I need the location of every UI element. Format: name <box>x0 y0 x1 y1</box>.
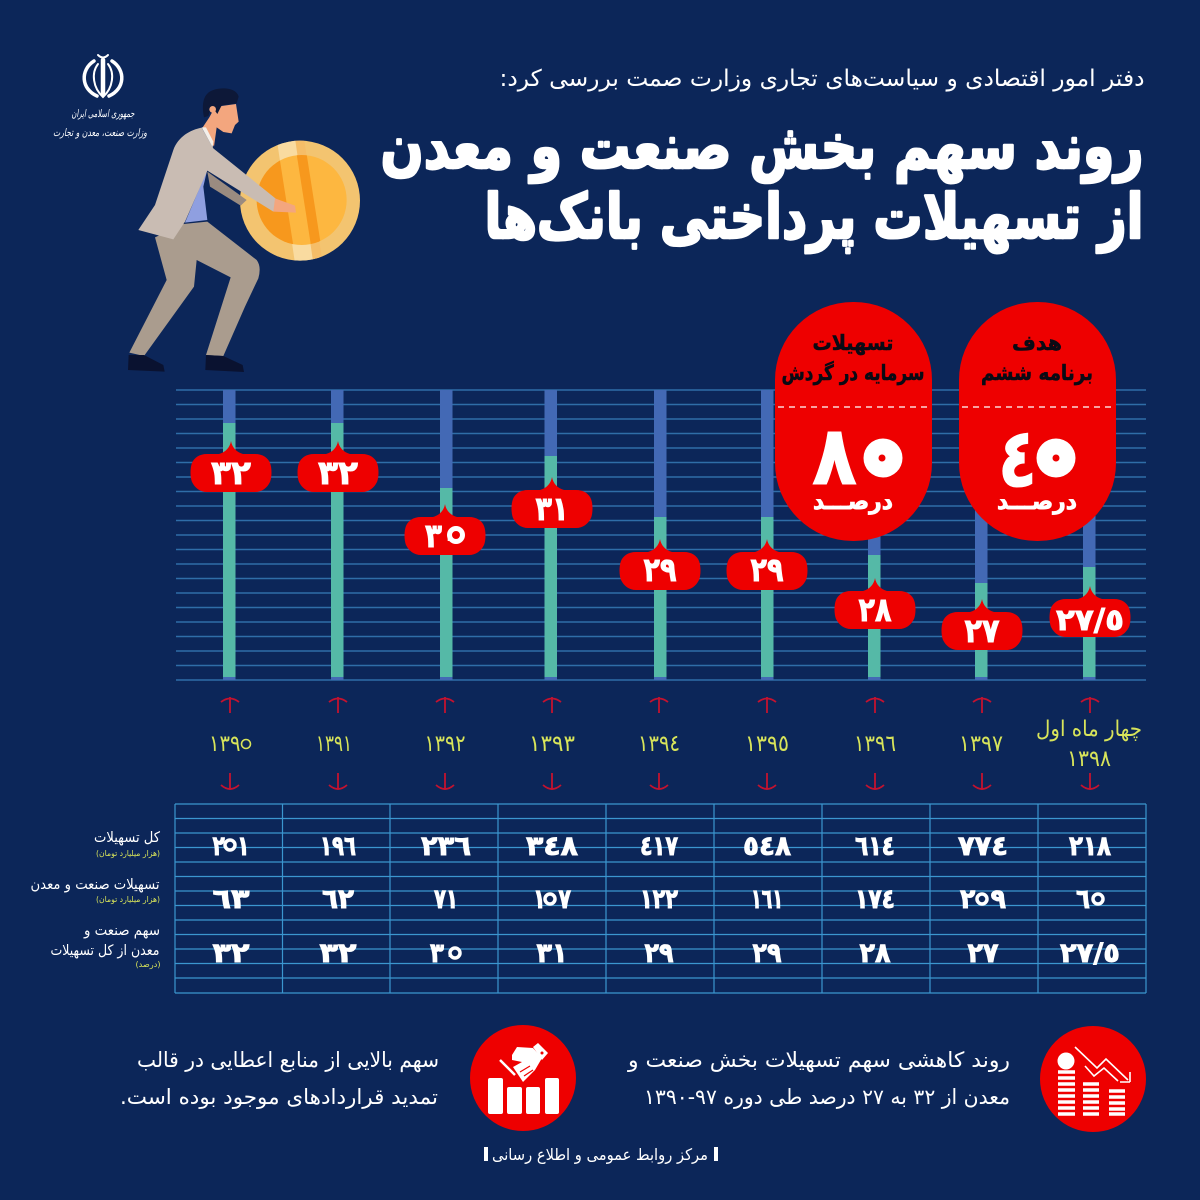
row: industry and mining facilities: ۱۲۲ <box>640 884 678 915</box>
row: total facilities: ۷۷٤ <box>958 831 1008 862</box>
table row labels: (هزار میلیارد تومان) <box>96 849 160 858</box>
icon: handshake over bars <box>470 1025 576 1131</box>
hair <box>203 88 239 117</box>
row: share of industry and mining: ۲۷ <box>968 938 999 969</box>
row: share of industry and mining: ۲۸ <box>860 938 891 969</box>
value labels: ۲۸ <box>858 590 892 629</box>
ear <box>209 106 216 113</box>
year labels: چهار ماه اول <box>1036 717 1142 742</box>
callout: working capital facilities 80 percent: درصـــد <box>813 489 893 515</box>
collar <box>202 127 213 147</box>
text: declining share note: روند کاهشی سهم تسهیلات بخش صنعت و <box>627 1048 1010 1073</box>
row: industry and mining facilities: ٦۰ <box>1076 884 1104 915</box>
value labels: ۲۹ <box>644 550 676 589</box>
year labels: ۱۳۹٦ <box>854 731 896 757</box>
year labels: ۱۳۹۰ <box>209 731 251 757</box>
callout: working capital facilities 80 percent: ۸۰ <box>812 409 902 504</box>
callout: sixth plan target 40 percent: درصـــد <box>997 489 1077 515</box>
illustration: businessman pushing a gold coin <box>128 88 360 372</box>
year labels: ۱۳۹٤ <box>638 731 680 757</box>
row: share of industry and mining <box>212 938 1120 969</box>
callout: sixth plan target 40 percent: هدف <box>1012 331 1062 355</box>
row: total facilities: ۲۰۱ <box>212 831 250 862</box>
table row labels: (درصد) <box>136 960 160 969</box>
chart: share of industry and mining by year <box>176 390 1146 680</box>
year labels: ۱۳۹۷ <box>959 731 1003 757</box>
row: industry and mining facilities: ۱۰۷ <box>533 884 571 915</box>
data table <box>175 804 1146 993</box>
neck and head <box>203 104 239 147</box>
year labels: ۱۳۹۸ <box>1067 746 1111 772</box>
row: industry and mining facilities: ۲۰۹ <box>960 884 1006 915</box>
hand <box>273 198 296 213</box>
trousers <box>129 222 260 356</box>
row: industry and mining facilities: ۱۷٤ <box>855 884 895 915</box>
row: share of industry and mining: ۲۹ <box>752 938 782 969</box>
value labels: ۳۱ <box>536 489 568 528</box>
value labels: ۳۲ <box>211 453 251 492</box>
row: total facilities: ۱۹٦ <box>320 831 356 862</box>
value labels: ۲۷/٥ <box>1056 603 1124 638</box>
footer: public relations credit: مرکز روابط عمومی و اطلاع رسانی <box>492 1145 708 1165</box>
row: share of industry and mining: ۲۹ <box>644 938 674 969</box>
table row labels: معدن از کل تسهیلات <box>50 943 160 959</box>
bars <box>223 390 1096 680</box>
text: declining share note <box>627 1048 1010 1109</box>
text: extension of contracts note <box>120 1048 439 1109</box>
row: total facilities: ۲۳٦ <box>421 831 471 862</box>
year labels: ۱۳۹۳ <box>529 731 575 757</box>
subtitle: دفتر امور اقتصادی و سیاست‌های تجاری وزارت صمت بررسی کرد: <box>500 66 1144 92</box>
row: industry and mining facilities: ٦۲ <box>322 884 354 915</box>
row: industry and mining facilities <box>212 884 1104 915</box>
callout: working capital facilities 80 percent: تسهیلات <box>812 331 894 355</box>
callout: sixth plan target 40 percent: برنامه ششم <box>981 361 1093 385</box>
callout: sixth plan target 40 percent <box>959 302 1116 541</box>
table row labels <box>30 830 160 969</box>
row: total facilities <box>212 831 1111 862</box>
year labels: ۱۳۹۱ <box>316 731 352 757</box>
shoes <box>128 355 244 372</box>
row: share of industry and mining: ۳۲ <box>320 938 357 969</box>
value labels: ۳۰ <box>425 516 459 555</box>
icon: state emblem and ministry name <box>53 55 147 139</box>
title <box>380 110 1144 253</box>
row: total facilities: ۲۱۸ <box>1069 831 1111 862</box>
year labels <box>209 717 1142 772</box>
jacket with front arm <box>138 128 277 239</box>
value labels <box>190 441 1130 650</box>
row: industry and mining facilities: ۷۱ <box>434 884 458 915</box>
text: declining share note: معدن از ۳۲ به ۲۷ درصد طی دوره ۹۷-۱۳۹۰ <box>644 1085 1010 1109</box>
text: extension of contracts note: تمدید قراردادهای موجود بوده است. <box>120 1085 438 1109</box>
table row labels: سهم صنعت و <box>83 923 160 939</box>
back arm <box>207 172 247 206</box>
row: total facilities: ۳٤۸ <box>526 831 579 862</box>
value labels: ۲۷ <box>964 611 1000 650</box>
year labels: ۱۳۹٥ <box>745 731 789 757</box>
text: extension of contracts note: سهم بالایی از منابع اعطایی در قالب <box>137 1048 439 1073</box>
callout: working capital facilities 80 percent <box>775 302 932 541</box>
icon: state emblem and ministry name: وزارت صنعت، معدن و تجارت <box>53 127 147 139</box>
callout: working capital facilities 80 percent: سرمایه در گردش <box>782 360 924 385</box>
year labels: ۱۳۹۲ <box>424 731 466 757</box>
row: total facilities: ٥٤۸ <box>743 831 791 862</box>
row: share of industry and mining: ۳۱ <box>536 938 568 969</box>
arrows pointing down toward table <box>221 773 1099 789</box>
row: total facilities: ٦۱٤ <box>855 831 895 862</box>
arrows pointing up toward bars <box>221 697 1099 713</box>
value labels: ۲۹ <box>750 550 784 589</box>
icon: state emblem and ministry name: جمهوری اسلامی ایران <box>72 108 135 120</box>
row: industry and mining facilities: ۱٦۱ <box>751 884 783 915</box>
row: share of industry and mining: ۳۲ <box>212 938 250 969</box>
row: total facilities: ٤۱۷ <box>640 831 678 862</box>
row: industry and mining facilities: ٦۳ <box>212 884 250 915</box>
table row labels: تسهیلات صنعت و معدن <box>30 877 160 893</box>
row: share of industry and mining: ۲۷/٥ <box>1060 938 1120 969</box>
row: share of industry and mining: ۳۰ <box>430 938 458 969</box>
table row labels: کل تسهیلات <box>94 830 160 846</box>
gold coin <box>240 138 360 263</box>
icon: declining coin stacks <box>1040 1026 1146 1132</box>
callout: sixth plan target 40 percent: ٤۰ <box>998 411 1076 506</box>
shirt <box>185 169 207 223</box>
value labels: ۳۲ <box>318 453 358 492</box>
table row labels: (هزار میلیارد تومان) <box>96 895 160 904</box>
